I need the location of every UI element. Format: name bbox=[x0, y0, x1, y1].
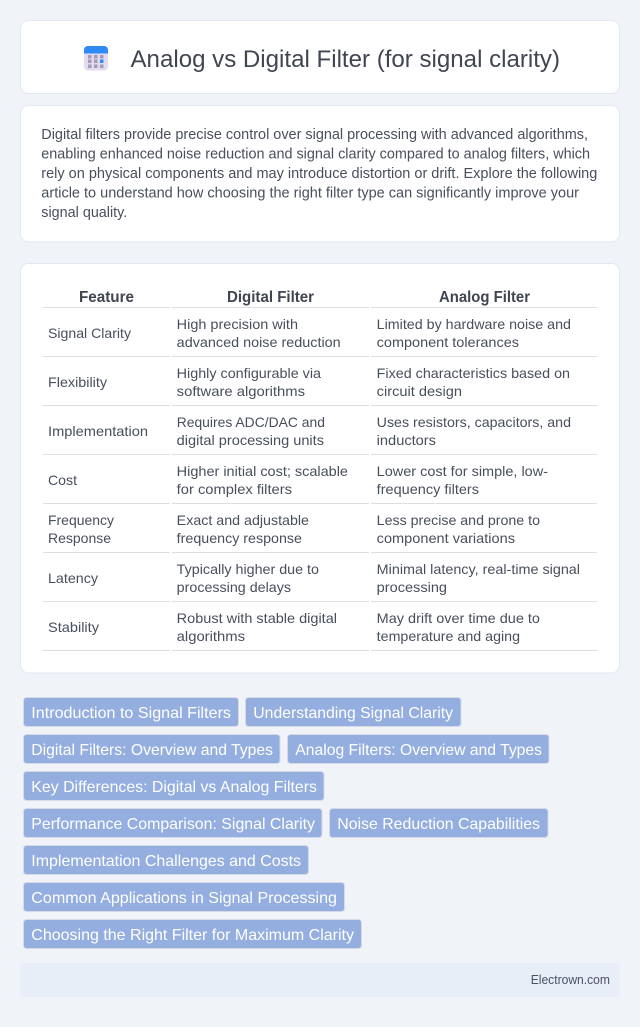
panel: introduction bbox=[20, 106, 620, 242]
row: signal clarity: advanced noise reduction bbox=[177, 334, 341, 350]
footer: Electrown.com bbox=[531, 973, 610, 987]
row: signal clarity bbox=[48, 316, 571, 350]
tag: introduction: Introduction to Signal Filters bbox=[31, 705, 231, 722]
text block: intro paragraph: enabling enhanced noise reduction and signal clarity compared to analog filters, which bbox=[41, 146, 590, 162]
row: flexibility: Highly configurable via bbox=[177, 365, 321, 381]
row: implementation: Uses resistors, capacitors, and bbox=[377, 414, 571, 430]
tag: noise reduction: Noise Reduction Capabilities bbox=[337, 816, 540, 833]
row: frequency response bbox=[48, 512, 540, 546]
row: latency bbox=[48, 561, 580, 595]
tag: applications: Common Applications in Signal Processing bbox=[31, 890, 337, 907]
tag: noise reduction bbox=[330, 808, 548, 838]
row: signal clarity: component tolerances bbox=[377, 334, 519, 350]
row: flexibility: Flexibility bbox=[48, 374, 107, 390]
row: cost: frequency filters bbox=[377, 481, 479, 497]
table header row: Digital Filter bbox=[227, 289, 314, 306]
row: frequency response: Exact and adjustable bbox=[177, 512, 309, 528]
row: latency: processing bbox=[377, 579, 447, 595]
row: stability: Robust with stable digital bbox=[177, 610, 337, 626]
tag: key differences: Key Differences: Digital vs Analog Filters bbox=[31, 779, 317, 796]
tag: performance bbox=[24, 808, 322, 838]
row: stability: algorithms bbox=[177, 628, 245, 644]
row: cost: Cost bbox=[48, 472, 77, 488]
row: cost bbox=[48, 463, 548, 497]
row: signal clarity: Signal Clarity bbox=[48, 325, 131, 341]
table header row: Analog Filter bbox=[439, 289, 530, 306]
icon: calendar grid bbox=[84, 46, 108, 70]
text block: intro paragraph: Digital filters provide precise control over signal processing with advanced algorithms, bbox=[41, 127, 588, 143]
tag: implementation: Implementation Challenges and Costs bbox=[31, 853, 301, 870]
text block: intro paragraph: article to understand how choosing the right filter type can significantly improve your bbox=[41, 186, 579, 202]
row: implementation bbox=[48, 414, 571, 448]
tag: implementation bbox=[24, 846, 308, 874]
row: implementation: Implementation bbox=[48, 423, 148, 439]
tag: performance: Performance Comparison: Signal Clarity bbox=[31, 816, 315, 833]
row: cost: Higher initial cost; scalable bbox=[177, 463, 348, 479]
tag: key differences bbox=[24, 772, 324, 800]
table header row bbox=[79, 289, 530, 306]
row: signal clarity: High precision with bbox=[177, 316, 298, 332]
row: frequency response: component variations bbox=[377, 530, 515, 546]
row: cost: for complex filters bbox=[177, 481, 292, 497]
row: frequency response: Response bbox=[48, 530, 111, 546]
row: implementation: Requires ADC/DAC and bbox=[177, 414, 325, 430]
tag: choosing bbox=[24, 920, 362, 948]
row: implementation: digital processing units bbox=[177, 432, 324, 448]
row: flexibility: software algorithms bbox=[177, 383, 305, 399]
row: latency: Minimal latency, real-time signal bbox=[377, 561, 580, 577]
tag: understanding: Understanding Signal Clarity bbox=[253, 705, 453, 722]
text block: intro paragraph: rely on physical components and may introduce distortion or drift. Explore the following bbox=[41, 166, 597, 182]
tag: analog filters bbox=[288, 734, 549, 764]
row: cost: Lower cost for simple, low- bbox=[377, 463, 548, 479]
tag: understanding bbox=[246, 698, 461, 726]
panel: comparison table bbox=[20, 264, 620, 673]
tag: analog filters: Analog Filters: Overview and Types bbox=[295, 742, 542, 759]
row: frequency response: frequency response bbox=[177, 530, 302, 546]
row: stability: May drift over time due to bbox=[377, 610, 540, 626]
row: frequency response: Frequency bbox=[48, 512, 114, 528]
row: signal clarity: Limited by hardware noise and bbox=[377, 316, 571, 332]
text block: intro paragraph bbox=[41, 127, 597, 221]
tag: digital filters bbox=[24, 734, 280, 764]
row: latency: Latency bbox=[48, 570, 98, 586]
tag: choosing: Choosing the Right Filter for Maximum Clarity bbox=[31, 927, 354, 944]
title: Analog vs Digital Filter (for signal clarity) bbox=[130, 46, 560, 73]
text block: intro paragraph: signal quality. bbox=[41, 205, 127, 221]
row: frequency response: Less precise and prone to bbox=[377, 512, 540, 528]
row: stability: Stability bbox=[48, 619, 99, 635]
row: flexibility: Fixed characteristics based on bbox=[377, 365, 570, 381]
tag list: article sections bbox=[24, 698, 549, 948]
row: latency: processing delays bbox=[177, 579, 291, 595]
tag: digital filters: Digital Filters: Overview and Types bbox=[31, 742, 273, 759]
panel: header bbox=[20, 20, 620, 94]
row: stability: temperature and aging bbox=[377, 628, 520, 644]
row: latency: Typically higher due to bbox=[177, 561, 319, 577]
row: flexibility bbox=[48, 365, 570, 399]
footer bbox=[20, 963, 620, 997]
tag: applications bbox=[24, 882, 344, 912]
row: flexibility: circuit design bbox=[377, 383, 462, 399]
row: stability bbox=[48, 610, 540, 644]
tag: introduction bbox=[24, 698, 238, 726]
row: implementation: inductors bbox=[377, 432, 436, 448]
table header row: Feature bbox=[79, 289, 134, 306]
